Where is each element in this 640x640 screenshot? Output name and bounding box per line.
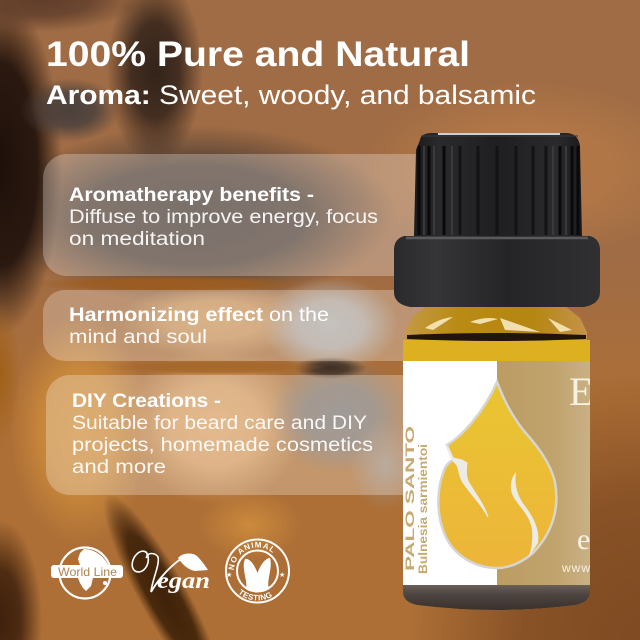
label: white side <box>403 361 498 586</box>
icon: World Line <box>51 548 123 598</box>
icon: Vegan: egan <box>157 568 210 593</box>
panel: DIY creations: DIY Creations - <box>72 391 221 412</box>
label: tan side <box>497 361 590 586</box>
bottle <box>394 133 600 618</box>
botanical name: Bulnesia sarmientoi <box>418 444 430 574</box>
bottle body <box>403 338 593 618</box>
panel: harmonizing effect: Harmonizing effect on the <box>69 305 329 326</box>
bottle base <box>403 585 590 610</box>
icon: no animal testing: ★ <box>279 571 285 579</box>
product name: PALO SANTO <box>403 426 417 571</box>
panel: DIY creations: Suitable for beard care and DIY <box>72 413 367 434</box>
brand lettering on label <box>562 378 590 572</box>
panel: aromatherapy benefits: on meditation <box>69 229 205 250</box>
icon: Vegan <box>132 551 210 593</box>
brand lettering on label: e <box>577 523 590 556</box>
title: 100% Pure and Natural <box>46 35 470 74</box>
icon: no animal testing: NO ANIMAL <box>228 542 274 570</box>
subtitle: aroma: Aroma: Sweet, woody, and balsamic <box>46 80 536 110</box>
panel: aromatherapy benefits: Aromatherapy benefits - <box>69 185 314 206</box>
bottle neck <box>405 306 587 345</box>
icon: oil drop <box>438 382 556 568</box>
cap <box>394 133 600 307</box>
icon: no animal testing <box>225 538 290 604</box>
panel: aromatherapy benefits <box>43 154 463 276</box>
icon: World Line: World Line <box>58 565 117 579</box>
icon: no animal testing: ★ <box>226 571 232 579</box>
panel: DIY creations: and more <box>72 457 166 478</box>
brand lettering on label: www <box>561 561 591 575</box>
neck oil line <box>407 333 586 341</box>
panel: harmonizing effect: mind and soul <box>69 327 207 348</box>
brand lettering on label: E <box>569 369 593 414</box>
panel: DIY creations: projects, homemade cosmetics <box>72 435 373 456</box>
cap collar <box>394 236 600 307</box>
panel: harmonizing effect <box>43 290 463 361</box>
panel: aromatherapy benefits: Diffuse to improve energy, focus <box>69 207 378 228</box>
icon: no animal testing: TESTING <box>239 588 272 600</box>
panel: DIY creations <box>46 375 466 495</box>
